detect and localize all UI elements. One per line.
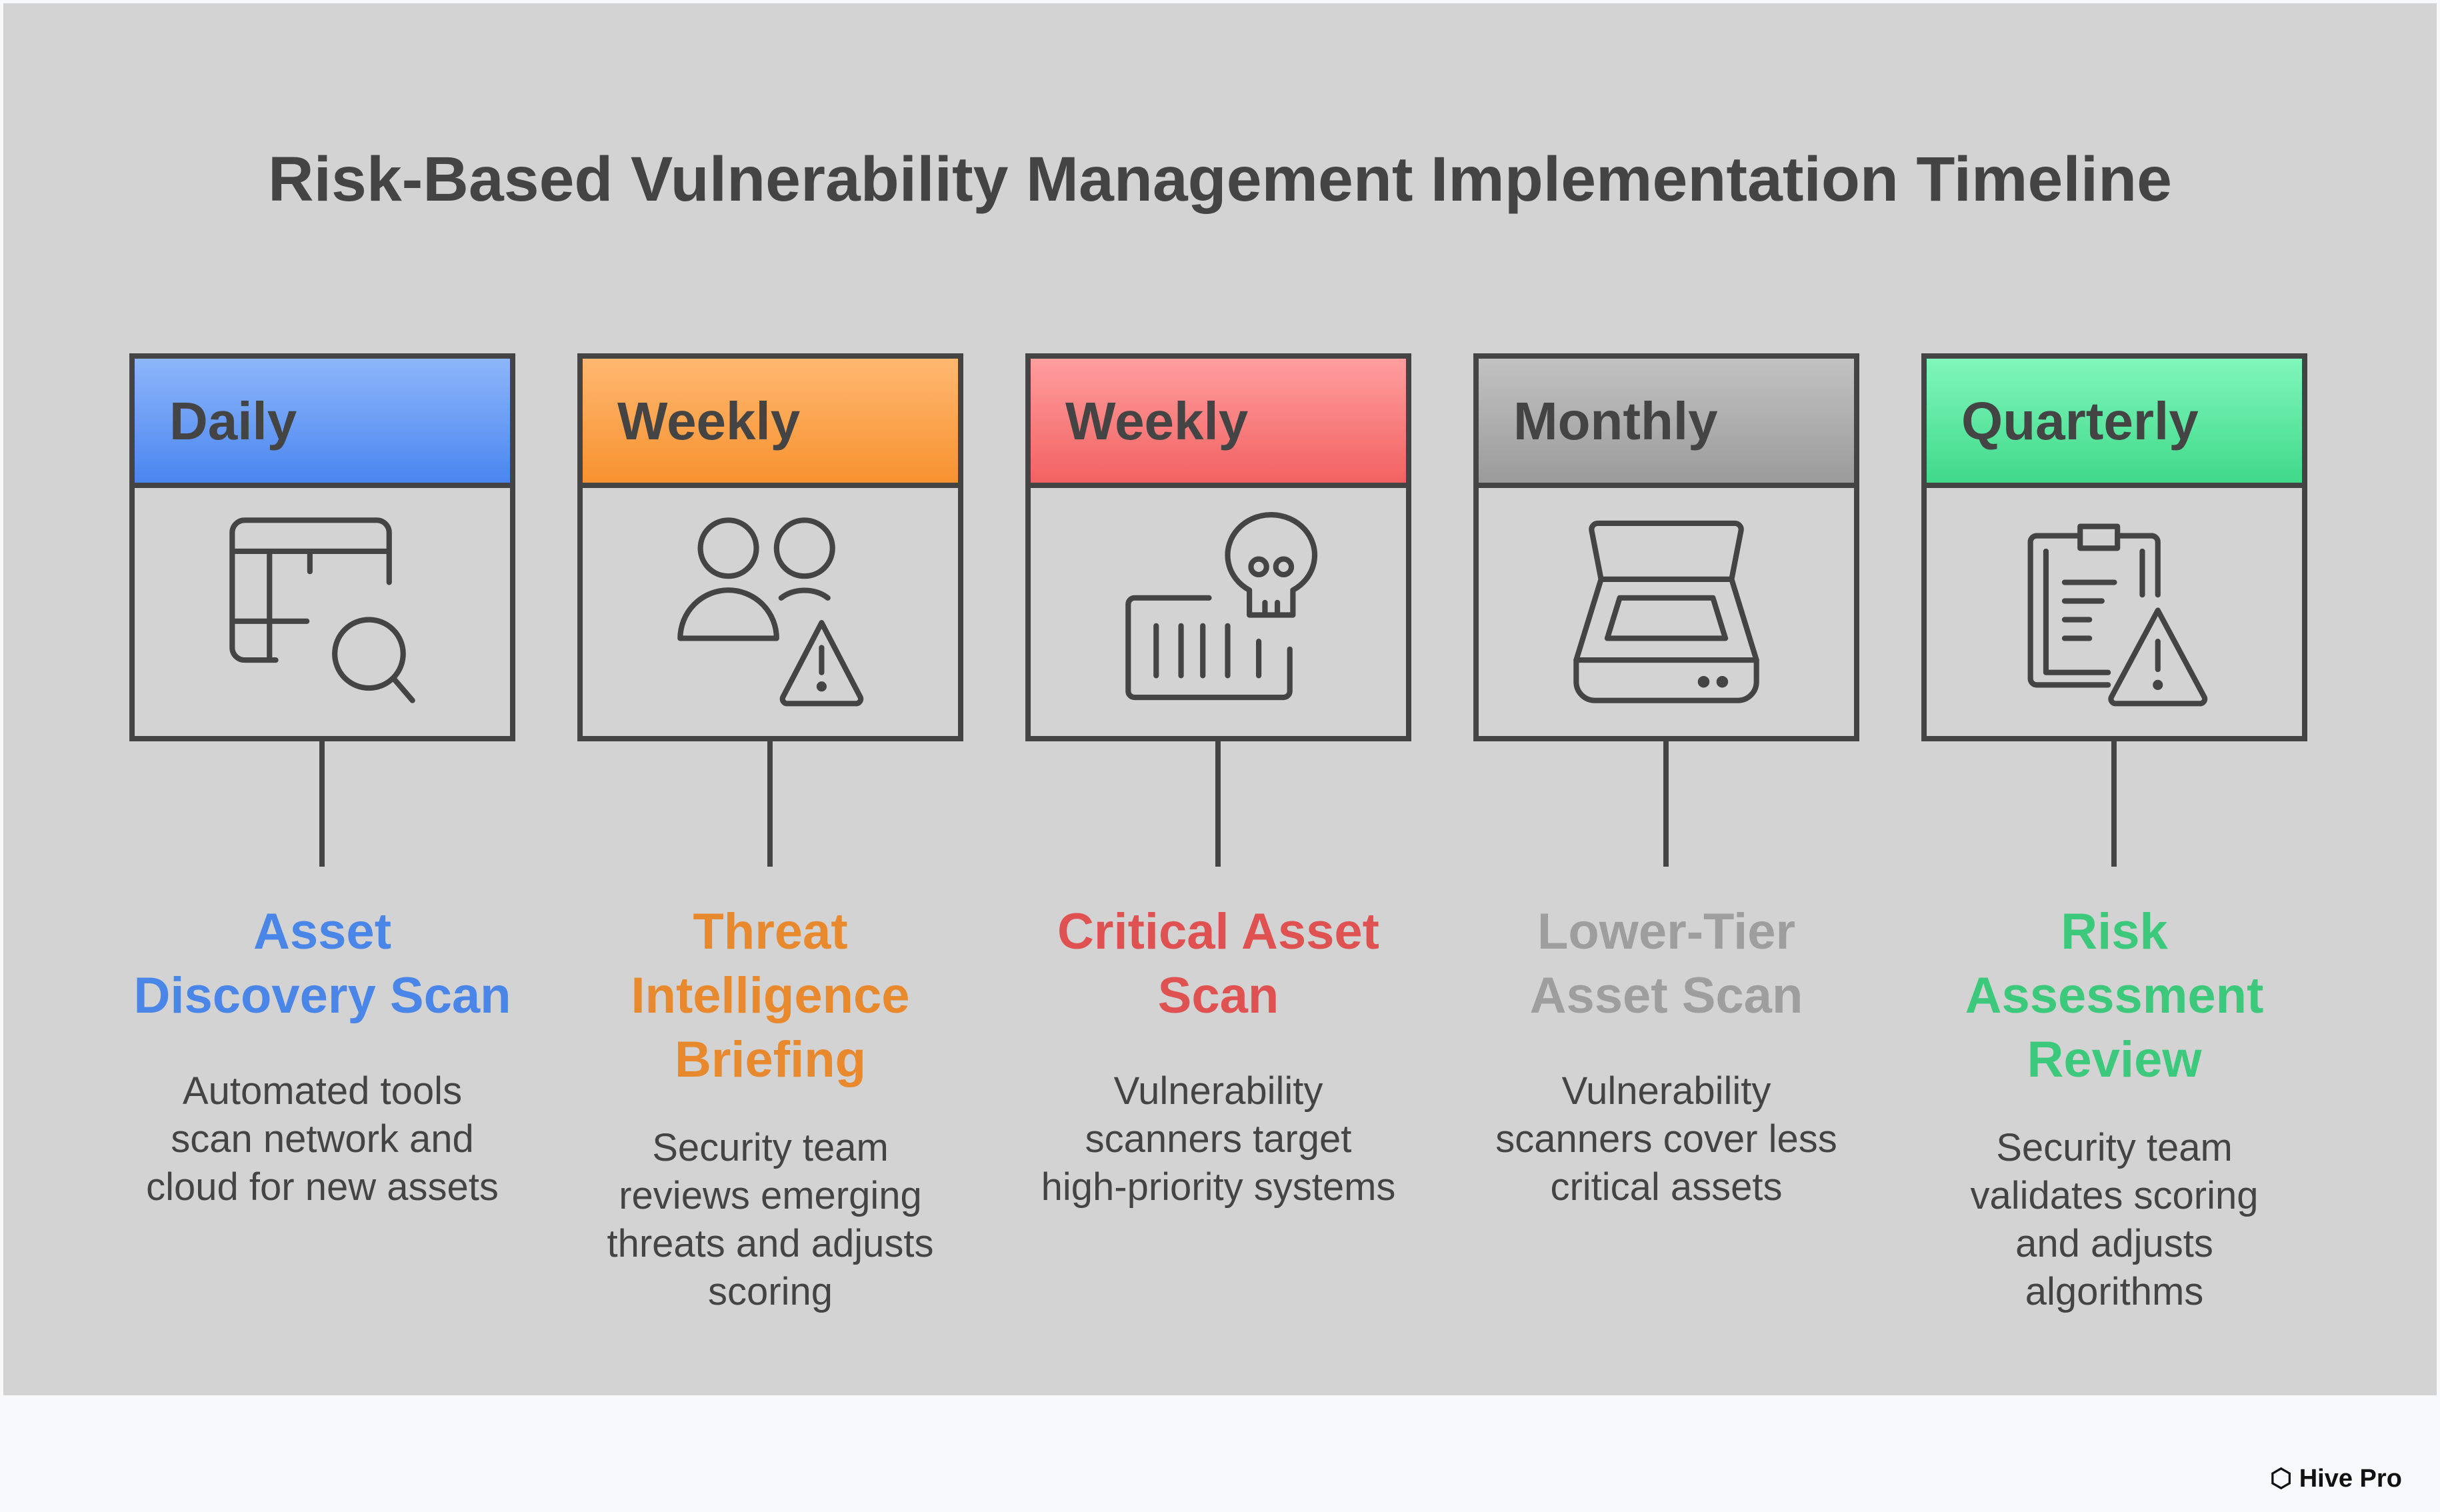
- header: Daily: Daily: [169, 391, 297, 451]
- icon: table with magnifier: [229, 517, 415, 703]
- icon: clipboard with warning: [2028, 524, 2208, 707]
- description: validates scoring: [1971, 1174, 2259, 1217]
- description: algorithms: [2025, 1270, 2203, 1313]
- description: and adjusts: [2015, 1222, 2213, 1265]
- description: Vulnerability: [1562, 1069, 1771, 1113]
- header: Quarterly: [1921, 353, 2307, 483]
- label: Critical Asset Scan: [1057, 903, 1379, 1024]
- header: Quarterly: Quarterly: [1961, 391, 2199, 451]
- label: Asset Discovery Scan: [133, 903, 511, 1024]
- description: [146, 1069, 499, 1209]
- icon: skull with barcode: [1125, 512, 1317, 700]
- description: scanners cover less: [1495, 1117, 1837, 1161]
- description: critical assets: [1550, 1165, 1783, 1209]
- icon: scanner: [1573, 520, 1759, 703]
- icon: people with warning: [677, 517, 864, 707]
- description: scoring: [708, 1270, 833, 1313]
- logo: Hive Pro: ⬡ Hive Pro: [2270, 1465, 2402, 1493]
- panel: daily: [129, 353, 515, 1209]
- description: Automated tools: [183, 1069, 462, 1113]
- description: [1495, 1069, 1837, 1209]
- label: Asset Discovery Scan: Asset: [253, 903, 391, 960]
- header: Monthly: [1473, 353, 1859, 483]
- panel: weekly threat: [577, 353, 963, 1313]
- header: Weekly: Weekly: [617, 391, 800, 451]
- label: Lower-Tier Asset Scan: Lower-Tier: [1537, 903, 1795, 960]
- panel: monthly: [1473, 353, 1859, 1209]
- description: Security team: [652, 1126, 889, 1169]
- description: [1971, 1126, 2259, 1313]
- label: Threat Intelligence Briefing: Intelligence: [631, 967, 910, 1024]
- label: Risk Assessment Review: Risk: [2061, 903, 2168, 960]
- description: scanners target: [1085, 1117, 1351, 1161]
- label: Risk Assessment Review: [1965, 903, 2263, 1088]
- label: Threat Intelligence Briefing: Threat: [693, 903, 848, 960]
- title: Risk-Based Vulnerability Management Implementation Timeline: [268, 144, 2172, 215]
- panel: quarterly: [1921, 353, 2307, 1313]
- header: Weekly: [1025, 353, 1411, 483]
- label: Lower-Tier Asset Scan: Asset Scan: [1530, 967, 1803, 1024]
- description: reviews emerging: [619, 1174, 922, 1217]
- header: Monthly: Monthly: [1513, 391, 1718, 451]
- label: Risk Assessment Review: Review: [2027, 1031, 2201, 1088]
- label: Risk Assessment Review: Assessment: [1965, 967, 2263, 1024]
- description: threats and adjusts: [607, 1222, 934, 1265]
- description: scan network and: [171, 1117, 474, 1161]
- description: [1041, 1069, 1395, 1209]
- header: Daily: [129, 353, 515, 483]
- description: [607, 1126, 934, 1313]
- label: Threat Intelligence Briefing: Briefing: [675, 1031, 866, 1088]
- description: Security team: [1996, 1126, 2233, 1169]
- header: Weekly: Weekly: [1065, 391, 1248, 451]
- panel: weekly critical: [1025, 353, 1411, 1209]
- description: Vulnerability: [1114, 1069, 1323, 1113]
- label: Critical Asset Scan: Scan: [1158, 967, 1279, 1024]
- description: cloud for new assets: [146, 1165, 499, 1209]
- label: Asset Discovery Scan: Discovery Scan: [133, 967, 511, 1024]
- header: Weekly: [577, 353, 963, 483]
- label: Lower-Tier Asset Scan: [1530, 903, 1803, 1024]
- label: Threat Intelligence Briefing: [631, 903, 910, 1088]
- label: Critical Asset Scan: Critical Asset: [1057, 903, 1379, 960]
- description: high-priority systems: [1041, 1165, 1395, 1209]
